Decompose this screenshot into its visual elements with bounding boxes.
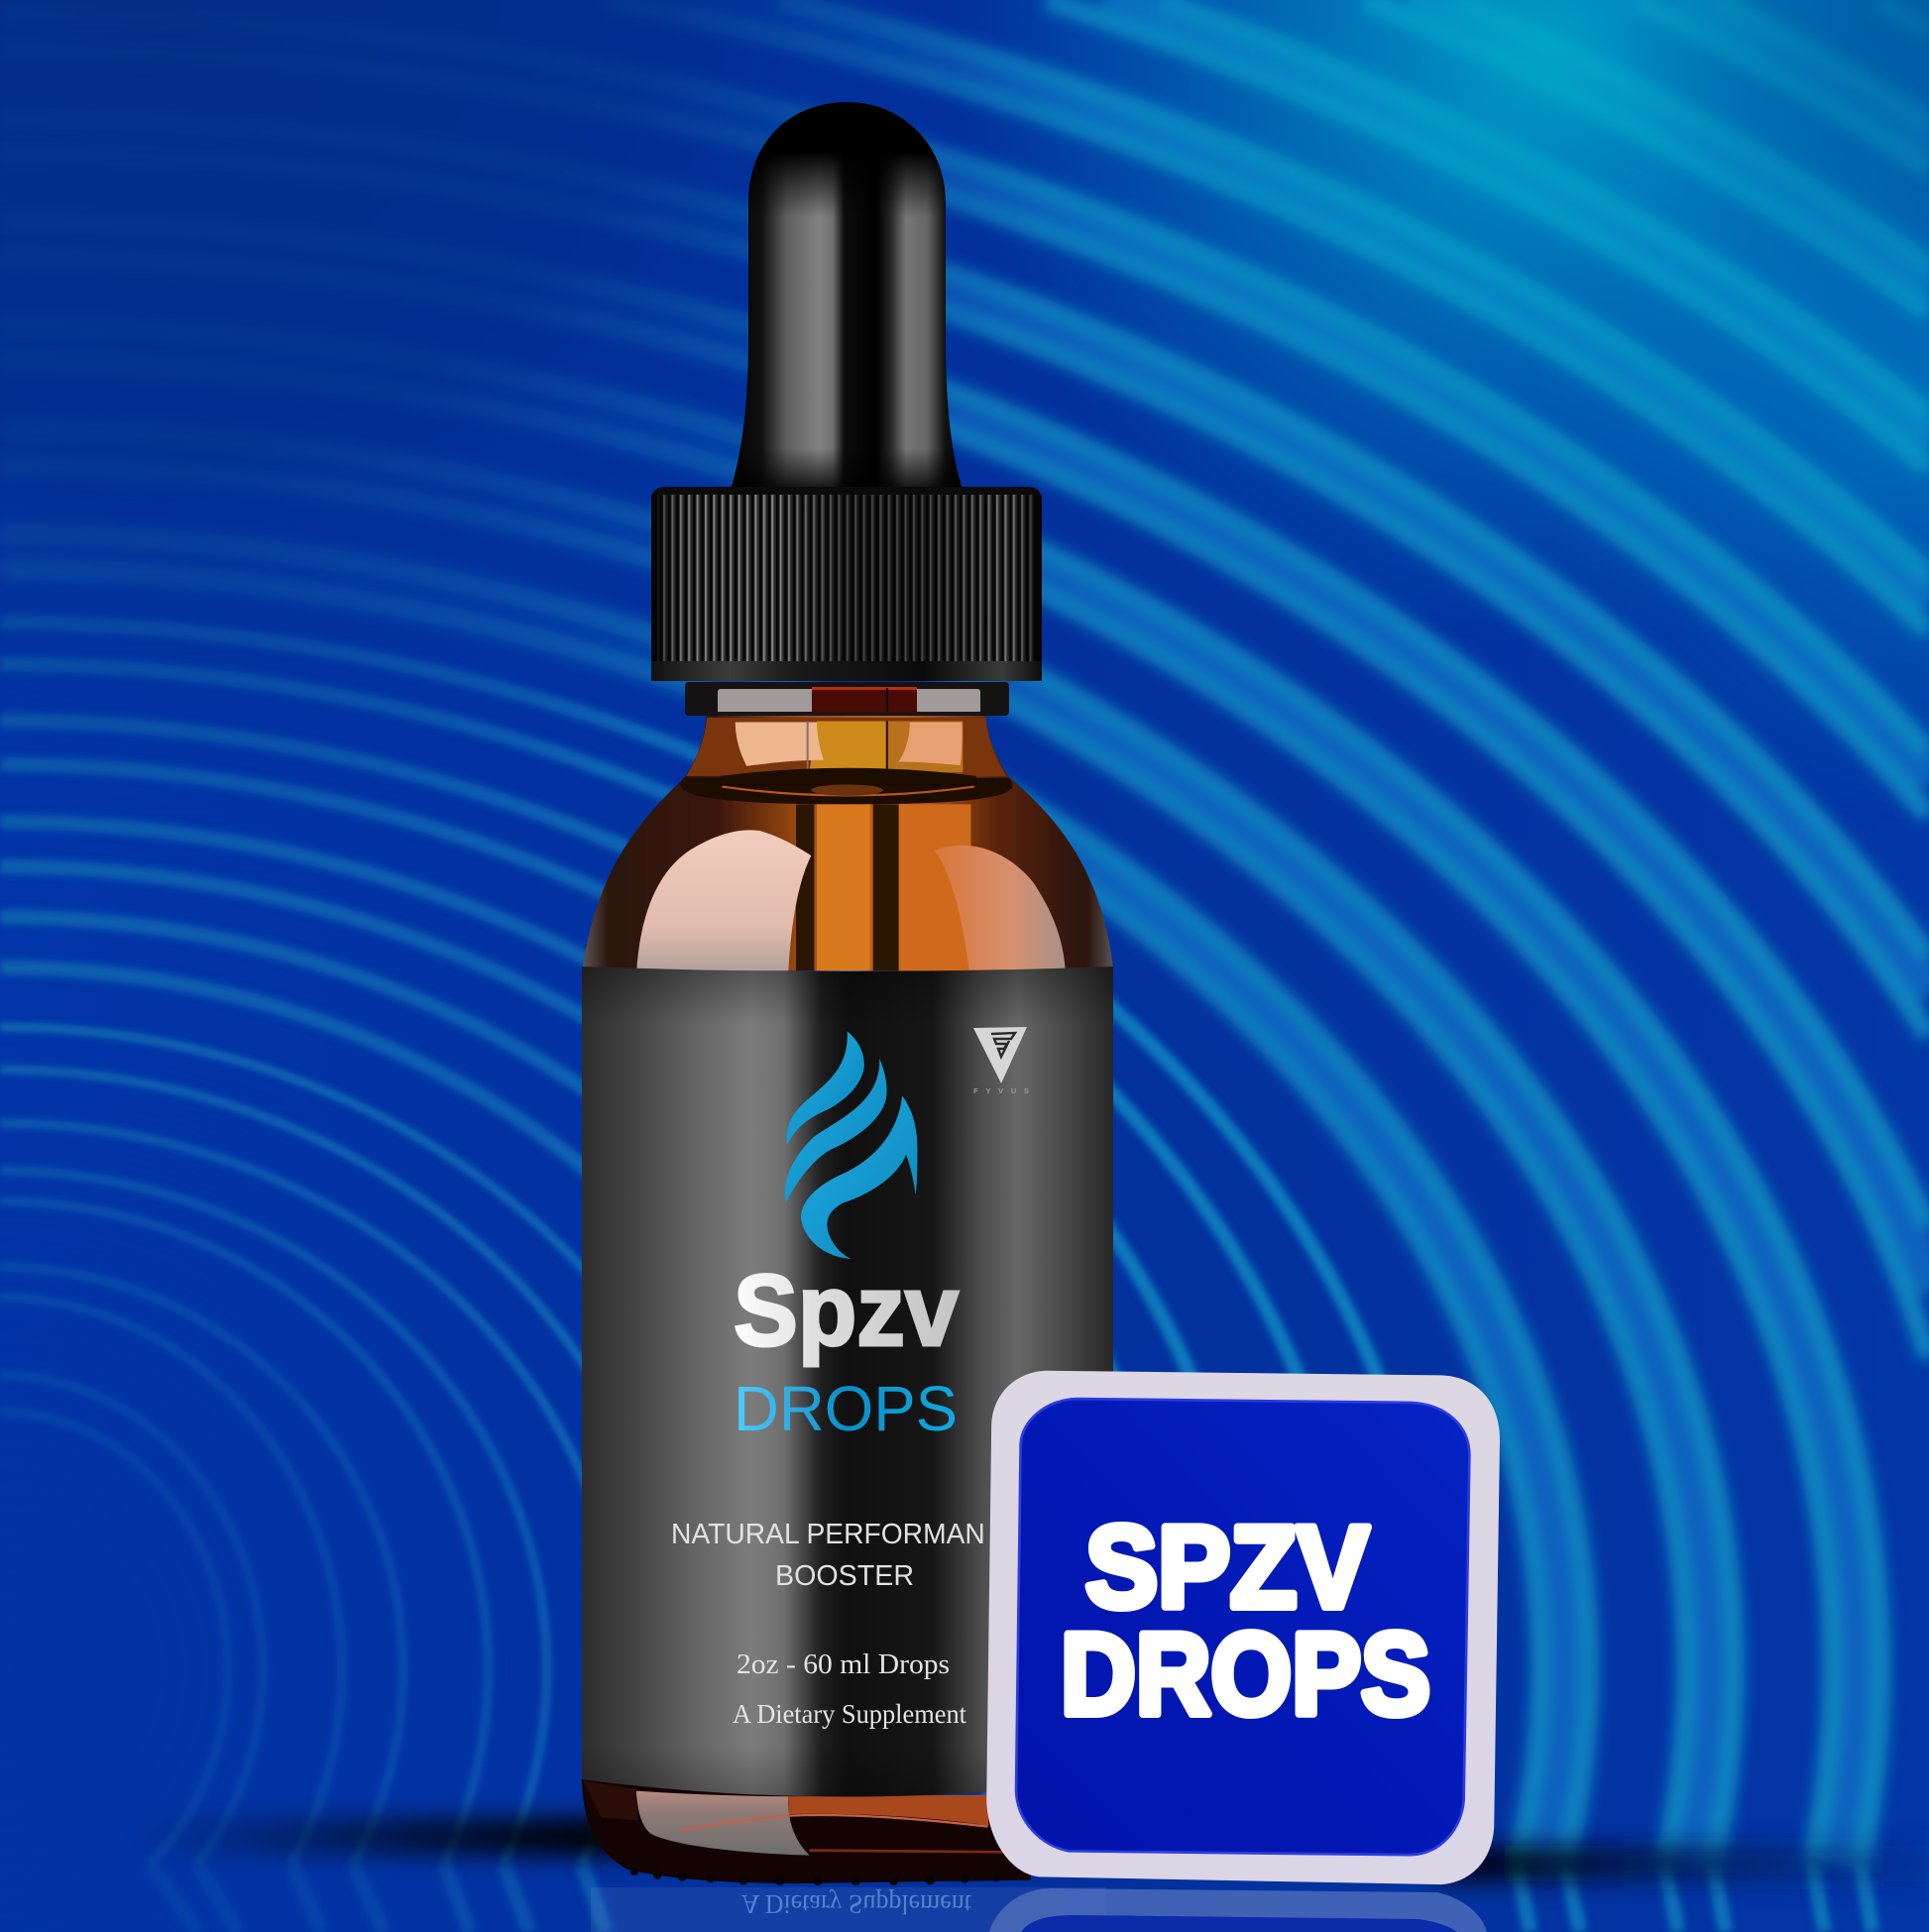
product name: Spzv: Spzv (734, 1254, 959, 1367)
icon: Fyvus triangle mark (973, 1027, 1029, 1095)
bottle reflection on floor (591, 1887, 1106, 1932)
badge text: DROPS (1061, 1609, 1430, 1739)
size and supplement text: 2oz - 60 ml Drops (737, 1649, 950, 1680)
badge text (1061, 1502, 1430, 1739)
floor shadow (129, 1818, 1929, 1881)
bottle reflection on floor: A Dietary Supplement (741, 1889, 971, 1919)
tagline: NATURAL PERFORMANCE (671, 1519, 1024, 1550)
Spzv Drops badge (986, 1371, 1500, 1884)
glass shoulder and neck (583, 716, 1113, 970)
knurled dropper cap (651, 487, 1042, 681)
base beading (630, 1867, 1000, 1885)
product name: DROPS: DROPS (734, 1373, 958, 1444)
bottle base glass (582, 1779, 1031, 1885)
dropper bottle (582, 102, 1113, 1885)
badge text: SPZV (1085, 1502, 1369, 1632)
brand name small: FYVUS (973, 1086, 1029, 1095)
size and supplement text (733, 1649, 966, 1729)
neck collar (685, 682, 1009, 716)
dropper rubber bulb (732, 102, 962, 487)
glare highlights (636, 830, 811, 970)
badge reflection on floor (989, 1888, 1487, 1932)
floor reflection of rings (150, 1864, 1872, 1932)
tagline (673, 1523, 983, 1586)
pipette tube (796, 804, 814, 970)
size and supplement text: A Dietary Supplement (733, 1699, 966, 1729)
icon: blue flame logo (785, 1031, 917, 1259)
badge frame (986, 1371, 1500, 1884)
tagline: BOOSTER (775, 1560, 914, 1592)
dark product label (582, 966, 1113, 1796)
liquid level (681, 778, 1013, 804)
